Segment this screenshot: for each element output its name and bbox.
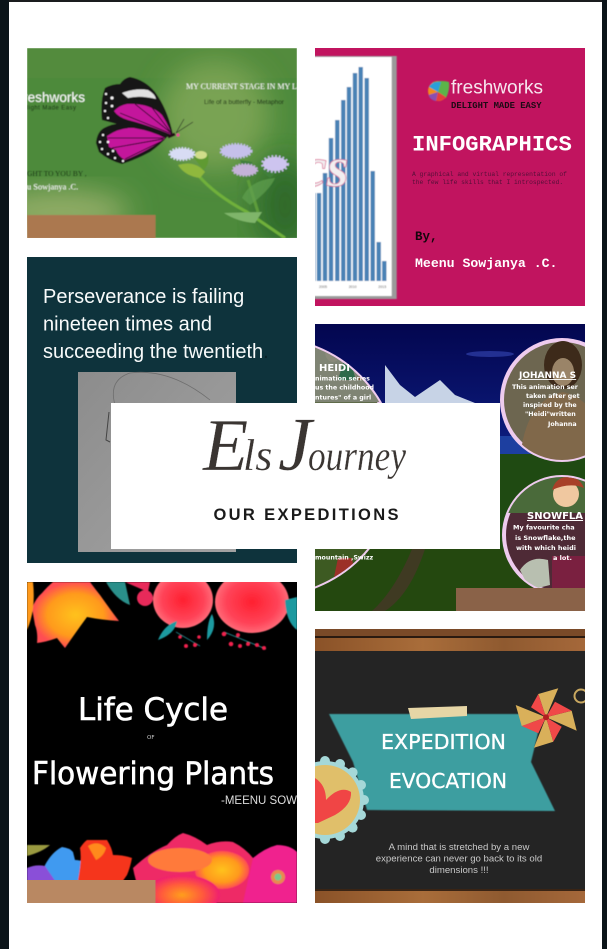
title: Els Journey: ls [243,431,272,480]
wood plank: top [315,629,585,651]
text: slide heading: Life of a butterfly - Metaphor [204,99,285,106]
bar chart [315,55,398,300]
text: chart axis years: 2015 [378,285,386,289]
circle: Snowflake [502,475,585,588]
title: Els Journey: E [202,405,248,487]
text: chart axis years [318,285,387,288]
text: description [412,171,567,186]
text: Johanna caption: taken after get [526,393,580,400]
text: quote: nineteen times and [43,314,212,336]
text: chart axis years: 2010 [349,285,357,289]
text: life cycle title: Life Cycle [78,692,228,728]
text: life cycle title [32,692,274,792]
text: description: A graphical and virtual representation of [412,171,567,178]
panel: expedition evocation [315,629,585,903]
text: quote [376,842,542,876]
subtitle: our expeditions: OUR EXPEDITIONS [214,506,398,524]
text: Heidi caption: ntures" of a girl [315,394,371,402]
sketch photo [78,372,236,552]
mountains [385,365,475,403]
text: Snowflake caption: SNOWFLA [527,511,583,522]
circle: Heidi [315,345,382,589]
text: tagline: DELIGHT MADE EASY [451,101,542,111]
icon: pinwheel [516,688,577,748]
brown block [27,880,156,903]
text: freshworks wordmark: light Made Easy [27,106,76,112]
heading: infographics: INFOGRAPHICS [412,132,572,158]
ribbon banner [329,714,555,811]
text: banner title [381,730,507,793]
panel: butterfly metaphor slide [27,48,297,238]
text: Snowflake caption: with which heidi [516,544,576,552]
text: byline [415,230,557,271]
text: script lettering over the chart: cs [302,137,349,199]
text: quote [43,286,269,363]
text: Johanna caption: JOHANNA S [518,371,576,381]
text: freshworks logotype: freshworks [451,78,543,98]
icon: bottom flowers [27,832,297,903]
panel: infographics cover [302,48,585,306]
text: byline: u Sowjanya .C. [27,182,78,192]
circle: Johanna [500,338,585,462]
text: Heidi caption: nimation series [315,376,370,382]
washi tape [408,706,467,719]
text: quote: experience can never go back to its old [376,854,542,864]
panel: life cycle of flowering plants [27,582,297,903]
text: banner title: EVOCATION [389,769,507,793]
text: banner title: EXPEDITION [381,730,506,754]
text: freshworks wordmark [27,91,86,112]
text: Johanna caption: inspired by the [523,402,577,409]
text: Snowflake caption: a lot. [553,554,572,562]
text: quote: succeeding the twentieth. [43,341,269,363]
text: Johanna caption: "Heidi"written [525,411,576,418]
text: byline [27,169,87,192]
title card [111,403,500,549]
icon: flower stem and leaves [170,144,287,238]
text: Heidi caption: HEIDI [319,363,350,374]
icon: freshworks logo [428,81,449,101]
panel: Heidi animation series [315,324,585,611]
text: quote: A mind that is stretched by a new [389,842,529,853]
tree trunk [372,549,425,611]
text: Snowflake caption [513,511,583,562]
icon: butterfly [96,77,193,164]
text: quote: Perseverance is failing [43,286,244,308]
text: Heidi caption [315,363,374,562]
text: Snowflake caption: My favourite cha [513,524,575,532]
text: byline: Meenu Sowjanya .C. [415,256,557,271]
brown block [27,215,156,238]
icon: ring [574,690,588,702]
text: Johanna caption: Johanna [547,421,577,428]
text: life cycle title: Flowering Plants [32,756,274,792]
text: byline: By, [415,230,438,244]
text: Snowflake caption: is Snowflake,the [515,534,576,542]
icon: top flowers [27,582,297,651]
text: life cycle title: OF [147,735,154,741]
text: Johanna caption: This animation ser [512,384,579,391]
brown block [456,588,585,611]
text: Heidi caption: us the childhood [315,384,374,392]
text: quote: dimensions !!! [429,865,489,876]
panel: perseverance quote [27,257,297,563]
text: slide heading [186,82,297,106]
text: chart axis years: 2005 [319,285,327,289]
text: freshworks wordmark: freshworks [19,90,85,105]
text: Johanna caption [512,371,580,428]
text: slide heading: MY CURRENT STAGE IN MY LIFE [186,82,309,91]
text: byline: GHT TO YOU BY , [27,169,87,178]
title: Els Journey: ourney [308,434,406,480]
wood plank: bottom [315,889,585,903]
icon: heart badge [286,756,369,844]
text: Heidi caption: mountain ,Swizz [315,554,374,562]
title: Els Journey: J [278,403,315,487]
text: author: -MEENU SOWJANYA [221,795,334,807]
text: description: the few life skills that I introspected. [412,179,563,186]
